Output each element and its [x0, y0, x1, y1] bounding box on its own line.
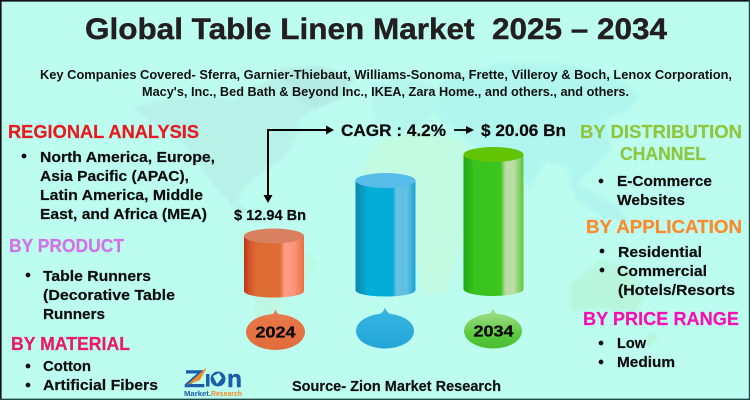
panel: by product: Table Runners	[43, 268, 151, 285]
panel: regional analysis: North America, Europe,	[40, 149, 215, 166]
panel: by price range	[583, 308, 739, 371]
badge: middle, no label	[356, 307, 414, 348]
heading: by application: BY APPLICATION	[586, 216, 742, 237]
panel: by application: Residential	[618, 244, 702, 261]
badge: 2024	[246, 309, 305, 350]
panel: regional analysis: East, and Africa (MEA)	[40, 206, 207, 223]
logo: Zion Market Research: Market.	[184, 389, 211, 398]
bar: 2034 cylinder	[464, 147, 524, 296]
panel: by price range: Medium	[617, 354, 675, 371]
panel: by material: Artificial Fibers	[43, 377, 158, 394]
panel: by distribution channel: Websites	[617, 192, 685, 209]
panel: by application: (Hotels/Resorts	[618, 282, 735, 299]
arrow: elbow from 2024 value to CAGR	[264, 126, 334, 203]
panel: by material: Cotton	[43, 358, 91, 375]
panel: by product: Runners	[43, 306, 105, 323]
background world map	[132, 62, 660, 350]
value 2034: $ 20.06 Bn	[481, 121, 566, 140]
badge: 2024: 2024	[256, 324, 296, 342]
heading: regional analysis: REGIONAL ANALYSIS	[8, 121, 199, 142]
bar: 2024 cylinder	[244, 228, 304, 298]
logo: Zion Market Research: Research	[211, 389, 242, 398]
panel: regional analysis: Latin America, Middle	[40, 187, 203, 204]
panel: by price range: Low	[617, 335, 646, 352]
panel: regional analysis	[8, 121, 215, 223]
logo: Zion Market Research: Z	[184, 366, 205, 393]
heading: by distribution channel: BY DISTRIBUTION	[580, 121, 742, 142]
key companies text	[40, 67, 732, 99]
panel: by application	[586, 216, 742, 299]
bar: middle cylinder	[356, 173, 416, 296]
heading: by product: BY PRODUCT	[9, 235, 125, 256]
value 2024: $ 12.94 Bn	[234, 207, 306, 224]
panel: regional analysis: Asia Pacific (APAC),	[40, 168, 189, 185]
panel: by product	[9, 235, 175, 323]
badge: 2034: 2034	[474, 324, 514, 340]
key companies text: Key Companies Covered- Sferra, Garnier-Thiebaut, Williams-Sonoma, Frette, Villeroy & Boch, Lenox Corporation,	[40, 67, 732, 82]
heading: by price range: BY PRICE RANGE	[583, 308, 739, 329]
heading: by material: BY MATERIAL	[11, 333, 130, 354]
heading: by distribution channel: CHANNEL	[620, 143, 706, 164]
panel: by product: (Decorative Table	[43, 287, 175, 304]
badge: 2034	[464, 308, 522, 348]
title: Global Table Linen Market 2025 – 2034	[85, 13, 667, 46]
logo: Zion Market Research: n	[227, 366, 242, 393]
arrow: CAGR to 2034 value	[454, 126, 474, 134]
key companies text: Macy's, Inc., Bed Bath & Beyond Inc., IKEA, Zara Home., and others., and others.	[142, 84, 629, 99]
source text: Source- Zion Market Research	[292, 379, 501, 395]
logo: Zion Market Research	[184, 366, 242, 398]
panel: by distribution channel: E-Commerce	[617, 173, 712, 190]
panel: by material	[11, 333, 158, 394]
CAGR label: CAGR : 4.2%	[341, 121, 446, 140]
panel: by distribution channel	[580, 121, 742, 209]
heading: by distribution channel	[580, 121, 742, 164]
panel: by application: Commercial	[617, 263, 707, 280]
